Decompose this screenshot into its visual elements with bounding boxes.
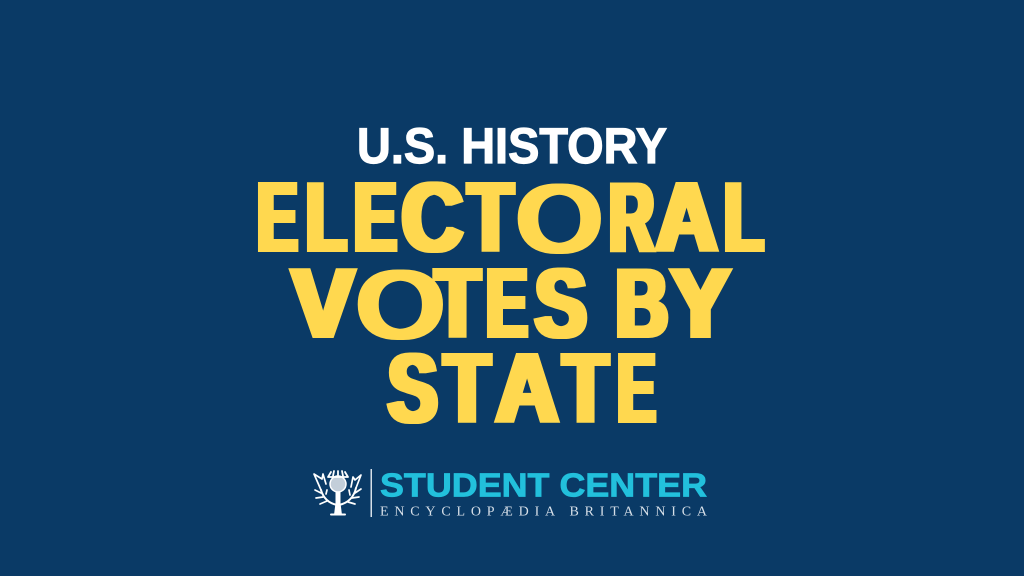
title: Electoral Votes by State: B xyxy=(616,248,668,358)
divider line xyxy=(370,469,372,517)
title: Electoral Votes by State: A xyxy=(496,333,558,443)
title: Electoral Votes by State: E xyxy=(354,162,396,272)
title: Electoral Votes by State: Y xyxy=(671,248,730,358)
wordmark: Student Center: STUDENT CENTER xyxy=(380,466,707,504)
title: Electoral Votes by State: V xyxy=(292,248,354,358)
icon: thistle xyxy=(314,471,361,515)
title: Electoral Votes by State xyxy=(258,162,763,443)
title: Electoral Votes by State: C xyxy=(402,162,463,272)
title: Electoral Votes by State: E xyxy=(618,333,655,443)
title: Electoral Votes by State: L xyxy=(724,162,763,272)
title: Electoral Votes by State: O xyxy=(358,252,443,357)
title: Electoral Votes by State: E xyxy=(258,162,297,272)
title: Electoral Votes by State: L xyxy=(306,162,346,272)
title: Electoral Votes by State: T xyxy=(563,333,608,443)
title: Electoral Votes by State: T xyxy=(468,162,513,272)
wordmark: Encyclopaedia Britannica: ENCYCLOPÆDIA BRITANNICA xyxy=(380,504,708,520)
title: Electoral Votes by State: T xyxy=(444,333,490,443)
title: Electoral Votes by State: S xyxy=(535,248,586,358)
title: Electoral Votes by State: S xyxy=(388,333,437,443)
title: Electoral Votes by State: T xyxy=(435,248,480,358)
title: Electoral Votes by State: R xyxy=(610,162,654,272)
title: Electoral Votes by State: A xyxy=(656,162,717,272)
title: Electoral Votes by State: O xyxy=(518,166,601,271)
title: Electoral Votes by State: E xyxy=(487,248,527,358)
heading: U.S. History: U.S. HISTORY xyxy=(357,118,667,174)
logo: Student Center, Encyclopaedia Britannica xyxy=(314,466,708,520)
